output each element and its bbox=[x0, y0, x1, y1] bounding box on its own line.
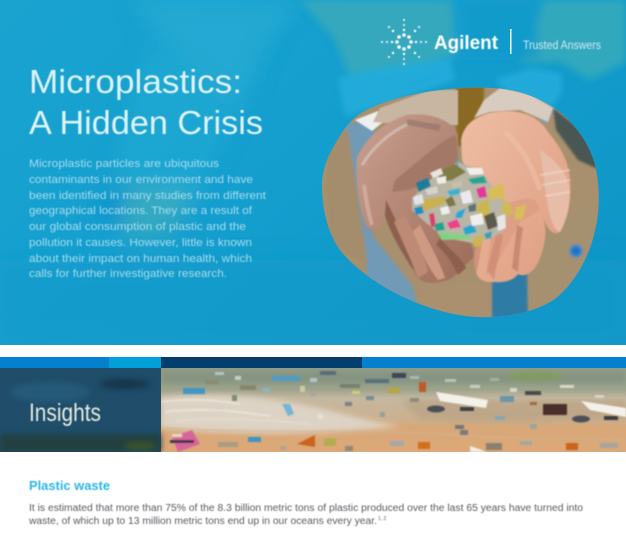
intro text block: about their impact on human health, which bbox=[29, 253, 252, 265]
text block: plastic waste: It is estimated that more than 75% of the 8.3 billion metric tons of plastic produced over the last 65 years have turned into bbox=[29, 503, 583, 514]
text block: plastic waste bbox=[28, 503, 583, 527]
left hand bbox=[356, 114, 474, 283]
panel: hero background bbox=[0, 0, 626, 345]
heading: Insights: Insights bbox=[29, 399, 101, 427]
microplastic pile bbox=[412, 155, 527, 247]
intro text block: contaminants in our environment and have bbox=[29, 174, 253, 186]
intro text block: Microplastic particles are ubiquitous bbox=[29, 158, 219, 170]
panel: Insights label bbox=[0, 368, 161, 452]
ground behind hands bbox=[315, 85, 605, 320]
photo: hands holding microplastics bbox=[315, 85, 605, 320]
intro text block: our global consumption of plastic and the bbox=[29, 221, 246, 233]
shirt cuff and gloves bbox=[355, 111, 383, 131]
intro text block: pollution it causes. However, little is known bbox=[29, 237, 252, 249]
colour band bbox=[0, 357, 626, 368]
intro text block: been identified in many studies from different bbox=[29, 190, 267, 202]
title: A Hidden Crisis bbox=[29, 104, 263, 141]
sleeves behind the logo bbox=[300, 0, 626, 80]
text block: plastic waste: 1, 2 bbox=[378, 516, 387, 522]
right hand bbox=[461, 111, 571, 282]
text block: plastic waste: waste, of which up to 13 million metric tons end up in our oceans every year. bbox=[28, 516, 377, 527]
intro text block: calls for further investigative research. bbox=[29, 268, 227, 280]
icon: Agilent spark bbox=[381, 19, 427, 65]
heading: Plastic waste: Plastic waste bbox=[29, 479, 110, 493]
tagline: Trusted Answers bbox=[523, 40, 601, 52]
title bbox=[29, 63, 263, 141]
title: Microplastics: bbox=[29, 63, 242, 100]
photo: polluted beach bbox=[161, 368, 626, 452]
intro text block: geographical locations. They are a result of bbox=[29, 205, 253, 217]
logo: Agilent Trusted Answers bbox=[381, 19, 601, 65]
wordmark: Agilent bbox=[434, 33, 499, 54]
debris bbox=[170, 371, 626, 452]
intro text block bbox=[29, 158, 267, 280]
